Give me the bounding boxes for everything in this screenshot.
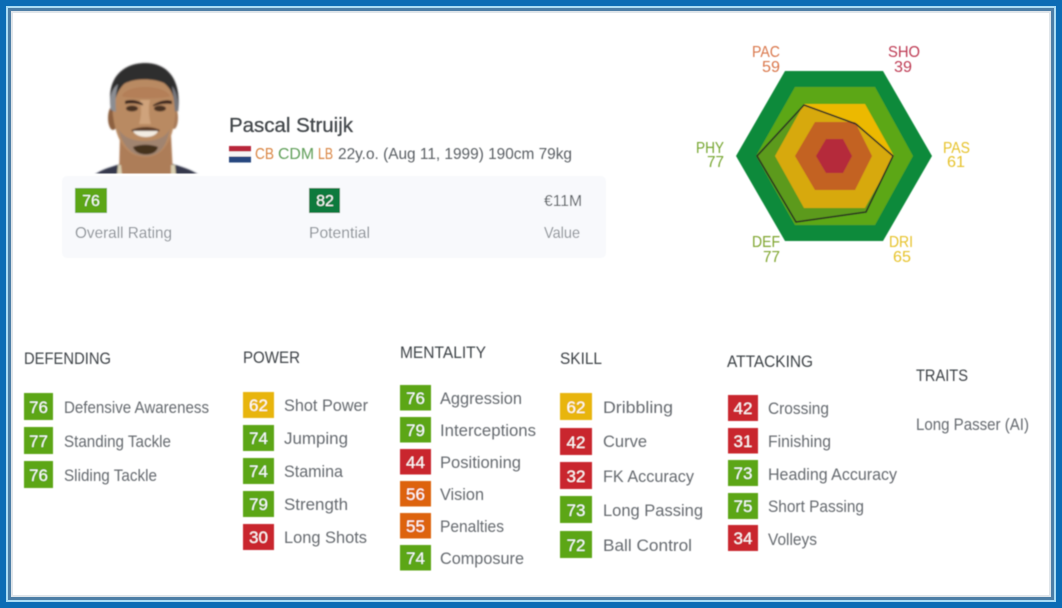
panel: defending bbox=[24, 350, 209, 488]
panel: skill: SKILL bbox=[560, 350, 602, 368]
axis label: DRI bbox=[889, 234, 913, 266]
stat: Ball Control: Ball Control bbox=[603, 537, 692, 555]
stat: Positioning: 44 bbox=[406, 453, 425, 472]
axis label: PAC: PAC bbox=[752, 44, 780, 61]
panel: defending: DEFENDING bbox=[24, 350, 111, 368]
stat: Crossing bbox=[728, 395, 829, 421]
stat: Positioning: Positioning bbox=[440, 454, 521, 472]
stat: Short Passing bbox=[728, 493, 864, 519]
axis label: SHO: SHO bbox=[888, 44, 920, 61]
axis label: SHO bbox=[888, 44, 920, 76]
stat: Shot Power: Shot Power bbox=[284, 397, 368, 415]
stat: Strength bbox=[243, 491, 348, 517]
stat: Defensive Awareness: Defensive Awareness bbox=[64, 399, 209, 417]
stat: FK Accuracy: FK Accuracy bbox=[603, 468, 695, 486]
stat: Long Passing: 73 bbox=[567, 501, 585, 520]
stat: Shot Power: 62 bbox=[249, 396, 268, 415]
stat: Sliding Tackle: 76 bbox=[29, 466, 48, 485]
panel: mentality bbox=[400, 344, 536, 570]
stat: Dribbling: 62 bbox=[567, 398, 585, 417]
axis label: PAC: 59 bbox=[762, 59, 780, 76]
stat: Finishing: 31 bbox=[734, 432, 752, 451]
panel: traits bbox=[916, 367, 1029, 434]
value: Value bbox=[544, 225, 580, 242]
stat: Aggression bbox=[400, 385, 522, 410]
panel: traits: Long Passer (AI) bbox=[916, 416, 1029, 434]
stat: Long Passing: Long Passing bbox=[603, 502, 703, 520]
axis label: PAS bbox=[943, 140, 970, 171]
stat: Shot Power bbox=[243, 392, 368, 418]
panel: attacking: ATTACKING bbox=[727, 353, 813, 371]
stat: Long Passing bbox=[560, 496, 703, 523]
stat: Jumping: Jumping bbox=[284, 430, 348, 448]
stat: Volleys: 34 bbox=[734, 529, 752, 548]
potential: 82 bbox=[316, 193, 334, 210]
stat: Composure: Composure bbox=[440, 550, 524, 568]
stat: Aggression: 76 bbox=[406, 389, 425, 408]
stat: Penalties bbox=[400, 513, 504, 538]
overall rating: Overall Rating bbox=[75, 225, 172, 242]
stat: Interceptions: Interceptions bbox=[440, 422, 536, 440]
axis label: DRI: 65 bbox=[893, 249, 911, 266]
stat: Defensive Awareness bbox=[24, 393, 209, 420]
player bio line: CB bbox=[255, 146, 274, 163]
overall rating: 76 bbox=[82, 193, 100, 210]
stat: FK Accuracy: 32 bbox=[567, 467, 585, 486]
radar chart bbox=[696, 44, 970, 266]
stat: Vision: Vision bbox=[440, 486, 484, 504]
stat: Crossing: 42 bbox=[734, 399, 752, 418]
stat: Penalties: Penalties bbox=[440, 518, 504, 536]
axis label: DEF bbox=[752, 234, 780, 266]
player stat polygon bbox=[757, 105, 893, 222]
stat: Composure bbox=[400, 545, 524, 570]
player bio line: LB bbox=[318, 146, 333, 163]
player bio line: CDM bbox=[278, 146, 314, 163]
stat: Heading Accuracy: Heading Accuracy bbox=[768, 466, 898, 484]
axis label: PHY: PHY bbox=[696, 140, 724, 157]
stat: Interceptions: 79 bbox=[406, 421, 425, 440]
stat: Vision: 56 bbox=[406, 485, 425, 504]
stat: Curve bbox=[560, 428, 647, 455]
stat: Heading Accuracy: 73 bbox=[734, 464, 752, 483]
stat: Finishing: Finishing bbox=[768, 433, 831, 451]
flag: Netherlands bbox=[229, 146, 251, 162]
axis label: DEF: DEF bbox=[752, 234, 780, 251]
overall rating bbox=[75, 188, 172, 242]
axis label: PAS: 61 bbox=[947, 154, 965, 171]
stat: FK Accuracy bbox=[560, 462, 695, 489]
stat: Long Shots bbox=[243, 524, 367, 550]
panel: traits: TRAITS bbox=[916, 367, 968, 385]
stat: Standing Tackle bbox=[24, 427, 171, 454]
stat: Ball Control: 72 bbox=[567, 536, 585, 555]
stat: Strength: 79 bbox=[249, 495, 268, 514]
potential bbox=[309, 188, 370, 242]
axis label: DRI: DRI bbox=[889, 234, 913, 251]
stat: Jumping bbox=[243, 425, 348, 451]
stat: Positioning bbox=[400, 449, 521, 474]
stat: Standing Tackle: Standing Tackle bbox=[64, 433, 171, 451]
axis label: PHY: 77 bbox=[707, 154, 724, 171]
stat: Standing Tackle: 77 bbox=[29, 432, 48, 451]
stat: Dribbling: Dribbling bbox=[603, 399, 673, 417]
stat: Stamina bbox=[243, 458, 344, 484]
panel: summary ratings bbox=[62, 176, 606, 258]
axis label: SHO: 39 bbox=[894, 59, 912, 76]
panel: power bbox=[243, 349, 368, 550]
stat: Composure: 74 bbox=[406, 549, 425, 568]
stat: Long Shots: Long Shots bbox=[284, 529, 367, 547]
stat: Finishing bbox=[728, 428, 831, 454]
axis label: DEF: 77 bbox=[763, 249, 780, 266]
axis label: PHY bbox=[696, 140, 724, 171]
panel: skill bbox=[560, 350, 703, 558]
stat: Long Shots: 30 bbox=[249, 528, 268, 547]
panel: attacking bbox=[727, 353, 898, 551]
stat: Aggression: Aggression bbox=[440, 390, 522, 408]
value: €11M bbox=[544, 193, 582, 210]
stat: Ball Control bbox=[560, 531, 692, 558]
player name: Pascal Struijk bbox=[229, 114, 354, 137]
stat: Dribbling bbox=[560, 393, 673, 420]
stat: Curve: 42 bbox=[567, 433, 585, 452]
stat: Curve: Curve bbox=[603, 433, 647, 451]
axis label: PAS: PAS bbox=[943, 140, 970, 157]
stat: Penalties: 55 bbox=[406, 517, 425, 536]
stat: Short Passing: Short Passing bbox=[768, 498, 864, 516]
stat: Vision bbox=[400, 481, 484, 506]
stat: Jumping: 74 bbox=[249, 429, 268, 448]
stat: Interceptions bbox=[400, 417, 536, 442]
stat: Short Passing: 75 bbox=[734, 497, 752, 516]
panel: mentality: MENTALITY bbox=[400, 344, 486, 362]
stat: Strength: Strength bbox=[284, 496, 348, 514]
stat: Sliding Tackle bbox=[24, 461, 157, 488]
value bbox=[544, 193, 582, 242]
player photo bbox=[94, 63, 199, 175]
player bio line: 22y.o. (Aug 11, 1999) 190cm 79kg bbox=[338, 146, 572, 163]
stat: Stamina: Stamina bbox=[284, 463, 344, 481]
stat: Volleys: Volleys bbox=[768, 531, 817, 549]
stat: Stamina: 74 bbox=[249, 462, 268, 481]
stat: Crossing: Crossing bbox=[768, 400, 829, 418]
panel: power: POWER bbox=[243, 349, 300, 367]
stat: Volleys bbox=[728, 525, 817, 551]
potential: Potential bbox=[309, 225, 370, 242]
stat: Heading Accuracy bbox=[728, 460, 898, 486]
stat: Sliding Tackle: Sliding Tackle bbox=[64, 467, 157, 485]
axis label: PAC bbox=[752, 44, 780, 76]
stat: Defensive Awareness: 76 bbox=[29, 398, 48, 417]
